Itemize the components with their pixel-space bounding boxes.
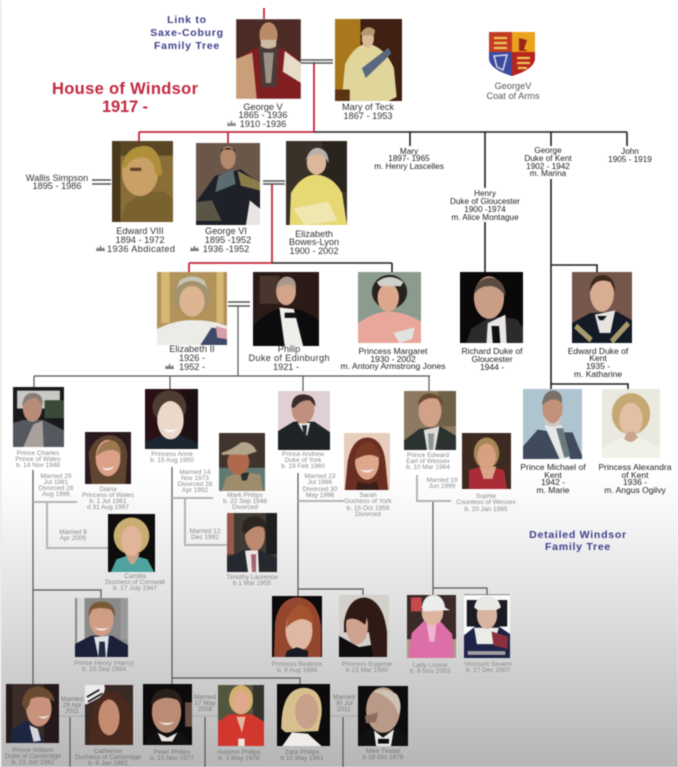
person: Elizabeth II: 1952 -	[179, 362, 205, 372]
marriage brackets	[33, 475, 451, 716]
person: Zara Philips: Zara Philips	[285, 749, 320, 756]
link: detailed Windsor family tree: Family Tree	[545, 541, 611, 553]
person: Princess Beatrice: b. 8 Aug 1988	[277, 667, 317, 674]
person: Princess Alexandra of Kent: Princess Alexandra	[598, 462, 672, 472]
person: Prince Edward	[404, 391, 456, 471]
link: detailed Windsor family tree: Detailed Windsor	[529, 529, 627, 541]
person: Catherine: Duchess of Cambridge	[75, 754, 141, 761]
person: Prince Andrew: Duke of York	[285, 457, 322, 464]
person: George V	[227, 19, 301, 129]
person: Peter Philips: b. 15 Nov 1977	[150, 755, 194, 762]
person: Mark Philips: b. 22 Sep 1948	[223, 498, 267, 505]
person: Princess Alexandra of Kent: m. Angus Ogilvy	[604, 485, 666, 495]
person: Wallis Simpson: Wallis Simpson	[26, 173, 88, 183]
person: Prince Michael of Kent: Kent	[544, 470, 562, 480]
person: Camilla: b. 17 July 1947	[113, 585, 157, 592]
person: John	[608, 147, 652, 164]
person: Elizabeth II: 1926 -	[179, 353, 205, 363]
person: Camilla: Duchess of Cornwall	[105, 579, 165, 586]
person: Princess Margaret: 1930 - 2002	[370, 354, 416, 364]
person: Mark Philips	[219, 433, 267, 511]
marriage note: Edward and Sophie	[426, 477, 458, 490]
person: Mark Philips: Mark Philips	[227, 492, 263, 499]
tree connectors: Elizabeth II descendants	[33, 306, 510, 684]
person: Sarah: Sarah	[359, 492, 377, 499]
person: Richard, Duke of Gloucester: Gloucester	[471, 354, 513, 364]
person: Sophie: Sophie	[476, 493, 496, 500]
marriage note: Peter and Autumn: 17 May	[194, 700, 216, 707]
person: George VI: 1895 -1952	[205, 235, 251, 245]
person: Philip	[248, 272, 330, 372]
person: Henry, Duke of Gloucester: Duke of Gloucester	[450, 197, 520, 206]
person: Edward, Duke of Kent: Edward Duke of	[568, 346, 629, 356]
person: Mike Tindall: Mike Tindall	[366, 748, 401, 755]
person: Edward VIII: 1936 Abdicated	[107, 244, 175, 254]
marriage note: Peter and Autumn	[194, 694, 216, 713]
marriage note: Edward and Sophie: Married 19	[426, 477, 458, 484]
marriage note: Andrew and Sarah: Married 23	[304, 473, 336, 480]
person: Henry, Duke of Gloucester: Henry	[474, 189, 497, 198]
person: Prince William: b. 21 Jun 1982	[11, 759, 55, 766]
person: Prince Edward: b. 10 Mar 1964	[406, 464, 450, 471]
person: Henry, Duke of Gloucester	[450, 189, 520, 222]
person: Sarah: b. 15 Oct 1959	[347, 505, 390, 512]
person: Edward VIII: 1894 - 1972	[115, 235, 165, 245]
person: Princess Eugenie: b 23 Mar 1990	[346, 667, 388, 674]
person: George VI: 1936 -1952	[203, 244, 249, 254]
person: Princess Margaret: Princess Margaret	[359, 346, 428, 356]
person: Richard, Duke of Gloucester: Richard Duke of	[462, 346, 523, 356]
person: Edward, Duke of Kent: m. Katharine	[574, 369, 622, 379]
marriage note: Zara and Mike: Married	[333, 694, 355, 701]
person: Prince Charles: Prince Charles	[17, 450, 60, 457]
marriage note: Andrew and Sarah	[303, 473, 338, 499]
person: Prince Edward: Earl of Wessex	[406, 458, 451, 465]
icon: George V coat of arms: GeorgeV	[495, 81, 532, 91]
link: Saxe-Coburg family tree: Link to	[167, 14, 207, 26]
marriage note: William and Catherine	[61, 696, 83, 715]
person: Sophie: Countess of Wessex	[456, 499, 516, 506]
marriage note: Charles and Camilla	[59, 529, 87, 542]
person: Mary of Teck: 1867 - 1953	[343, 111, 393, 121]
person: Prince Andrew	[278, 391, 330, 470]
person: Princess Eugenie: Princess Eugenie	[342, 661, 393, 668]
title	[52, 80, 199, 116]
link: detailed Windsor family tree	[529, 529, 627, 553]
person: Mary, Princess Royal: Mary	[400, 147, 419, 156]
person: Lady Louise: b. 8 Nov 2003	[410, 668, 451, 675]
person: Autumn Philips: b. 3 May 1978	[218, 755, 260, 762]
person: John: John	[621, 147, 639, 156]
person: George, Duke of Kent: m. Marina	[530, 169, 567, 178]
person: Sarah	[344, 433, 392, 518]
person: George VI: George VI	[205, 226, 247, 236]
marriage note: Peter and Autumn: Married	[194, 694, 216, 701]
person: Princess Beatrice: Princess Beatrice	[272, 661, 323, 668]
person: Princess Anne	[145, 389, 198, 464]
marriage note: Zara and Mike: 30 Jul	[335, 700, 353, 707]
person: John: 1905 - 1919	[608, 155, 652, 164]
person: Diana: d 31 Aug 1997	[87, 504, 129, 511]
marriage note: Andrew and Sarah: May 1996	[306, 492, 335, 499]
marriage note: Anne and Timothy: Married 12	[189, 528, 221, 535]
person: Prince Michael of Kent: m. Marie	[536, 485, 570, 495]
marriage note: William and Catherine: 29 Apr	[63, 702, 82, 709]
marriage note: Anne and Mark: Apr 1992	[182, 487, 209, 494]
person: Camilla: Camilla	[124, 573, 146, 580]
marriage double bars	[92, 60, 333, 306]
person: Sarah: Divorced	[355, 511, 381, 518]
person: Elizabeth Bowes-Lyon: Bowes-Lyon	[289, 237, 339, 247]
person: Mary of Teck: Mary of Teck	[342, 102, 394, 112]
person: Mary, Princess Royal: 1897- 1965	[388, 154, 430, 163]
person: Elizabeth II: Elizabeth II	[169, 344, 215, 354]
person: George V: George V	[243, 102, 284, 112]
person: Edward, Duke of Kent: 1935 -	[586, 361, 610, 371]
person: Sophie: b. 20 Jan 1965	[464, 506, 508, 513]
marriage note: Andrew and Sarah: Jul 1986	[308, 479, 333, 486]
person: Zara Philips: b 15 May 1981	[280, 755, 324, 762]
person: Lady Louise: Lady Louise	[412, 662, 448, 669]
marriage note: Anne and Timothy	[189, 528, 221, 541]
person: Prince Edward: Prince Edward	[407, 452, 450, 459]
marriage note: Andrew and Sarah: Divorced 30	[303, 486, 338, 493]
marriage note: Anne and Mark	[178, 469, 213, 494]
person: Princess Margaret	[340, 272, 446, 371]
marriage note: Charles and Diana: Aug 1996	[42, 491, 70, 498]
title: 1917 -	[102, 98, 148, 116]
link: Saxe-Coburg family tree: Saxe-Coburg	[150, 27, 224, 39]
person: Peter Philips: Peter Philips	[154, 749, 191, 756]
person: Elizabeth II	[157, 272, 227, 372]
person: Edward, Duke of Kent: Kent	[589, 353, 607, 363]
person: George V: 1865 - 1936	[238, 110, 288, 120]
person: Mary, Princess Royal	[374, 147, 444, 171]
marriage note: Anne and Mark: Married 14	[179, 469, 211, 476]
marriage note: William and Catherine: 2011	[65, 708, 79, 715]
person: Richard, Duke of Gloucester: 1944 -	[480, 362, 504, 372]
person: George, Duke of Kent: 1902 - 1942	[526, 162, 570, 171]
person: Princess Alexandra of Kent	[598, 389, 672, 495]
marriage note: Charles and Diana: Married 29	[40, 473, 72, 480]
person: Viscount Severn	[464, 595, 512, 674]
person: Zara Philips	[277, 684, 330, 762]
person: Autumn Philips: Autumn Philips	[217, 749, 261, 756]
person: Edward VIII	[96, 141, 175, 254]
person: Autumn Philips	[217, 685, 264, 762]
person: Mike Tindall	[358, 686, 408, 761]
person: Diana: b. 1 Jul 1961	[89, 498, 127, 505]
person: George, Duke of Kent: Duke of Kent	[524, 154, 572, 163]
person: Peter Philips	[143, 684, 194, 762]
marriage note: Peter and Autumn: 2008	[198, 706, 213, 713]
person: Philip: Philip	[278, 344, 300, 354]
person: Prince Charles	[13, 387, 64, 469]
person: Lady Louise	[407, 595, 456, 675]
marriage note: Anne and Mark: Divorced 28	[178, 481, 213, 488]
person: Princess Anne: b. 15 Aug 1950	[150, 457, 194, 464]
person: Catherine: Catherine	[94, 748, 122, 755]
person: Wallis Simpson: 1895 - 1986	[32, 181, 82, 191]
person: Prince Andrew: Prince Andrew	[282, 451, 324, 458]
person: Diana: Princess of Wales	[82, 492, 135, 499]
person: Mark Philips: Divorced	[232, 504, 258, 511]
marriage note: William and Catherine: Married	[61, 696, 83, 703]
person: Prince Michael of Kent	[520, 389, 586, 495]
person: Sarah: Duchess of York	[345, 498, 392, 505]
person: Prince Henry	[74, 598, 134, 673]
person: Elizabeth Bowes-Lyon: Elizabeth	[295, 229, 333, 239]
person: Prince Andrew: b. 19 Feb 1960	[281, 463, 325, 470]
person: George V: 1910 -1936	[240, 119, 286, 129]
tree connectors: royal line in red	[139, 8, 314, 272]
person: Sophie	[456, 433, 516, 513]
person: Richard, Duke of Gloucester	[460, 272, 523, 372]
marriage note: Anne and Mark: Nov 1973	[181, 475, 209, 482]
marriage note: Zara and Mike	[333, 694, 355, 713]
person: Wallis Simpson	[26, 173, 88, 191]
person: Princess Beatrice	[272, 596, 323, 674]
person: Catherine	[75, 685, 141, 767]
link: Saxe-Coburg family tree	[150, 14, 224, 52]
person: Princess Alexandra of Kent: 1936 -	[623, 477, 647, 487]
person: Mary of Teck	[335, 19, 402, 121]
person: Edward, Duke of Kent	[568, 272, 632, 379]
person: Princess Anne: Princess Anne	[151, 451, 193, 458]
marriage note: Charles and Camilla: Married 9	[59, 529, 87, 536]
marriage note: Anne and Timothy: Dec 1992	[191, 534, 219, 541]
person: George VI	[190, 143, 260, 254]
tree connectors: George V children and grandchildren in black	[272, 132, 628, 389]
person: Elizabeth Bowes-Lyon: 1900 - 2002	[289, 246, 339, 256]
person: Prince Michael of Kent: 1942 -	[541, 477, 565, 487]
person: Camilla	[105, 514, 165, 592]
person: Prince Henry: Prince Henry (Harry)	[74, 660, 134, 667]
icon: George V coat of arms	[486, 32, 540, 101]
person: Timothy Laurence	[226, 513, 278, 587]
person: Princess Eugenie	[339, 595, 393, 674]
marriage note: Edward and Sophie: Jun 1999	[429, 483, 456, 490]
person: Edward VIII: Edward VIII	[116, 226, 164, 236]
person: Henry, Duke of Gloucester: 1900 -1974	[464, 205, 506, 214]
person: Elizabeth Bowes-Lyon	[286, 141, 347, 256]
person: Diana	[82, 432, 135, 511]
person: Prince William	[5, 684, 61, 766]
marriage note: Charles and Diana: Jul 1981	[44, 479, 69, 486]
title: House of Windsor	[52, 80, 199, 98]
link: Saxe-Coburg family tree: Family Tree	[154, 40, 220, 52]
person: Princess Alexandra of Kent: of Kent	[622, 470, 649, 480]
person: Timothy Laurence: Timothy Laurence	[226, 574, 278, 581]
person: Prince Henry: b. 15 Sep 1984	[82, 666, 126, 673]
person: Philip: 1921 -	[273, 362, 299, 372]
person: Prince Michael of Kent: Prince Michael of	[520, 462, 586, 472]
person: George, Duke of Kent	[524, 146, 572, 178]
grandchildren marriage drop lines	[70, 717, 343, 767]
person: Catherine: b. 9 Jan 1982	[88, 760, 128, 767]
person: Prince William: Prince William	[12, 747, 54, 754]
person: Princess Margaret: m. Antony Armstrong Jones	[340, 361, 446, 371]
person: Diana: Diana	[100, 486, 117, 493]
person: Philip: Duke of Edinburgh	[248, 353, 330, 363]
person: Viscount Severn: Viscount Severn	[464, 661, 512, 668]
marriage note: Charles and Diana: Divorced 28	[39, 485, 74, 492]
person: Mike Tindall: b 18 Oct 1978	[363, 754, 404, 761]
marriage note: Zara and Mike: 2011	[337, 706, 351, 713]
icon: George V coat of arms: Coat of Arms	[486, 91, 540, 101]
marriage note: Charles and Camilla: Apr 2005	[60, 535, 87, 542]
person: Prince Charles: b. 14 Nov 1948	[16, 462, 60, 469]
person: Viscount Severn: b. 17 Dec 2007	[466, 667, 510, 674]
person: Prince Charles: Prince of Wales	[15, 456, 61, 463]
person: Mary, Princess Royal: m. Henry Lascelles	[374, 162, 444, 171]
person: Timothy Laurence: b 1 Mar 1955	[233, 580, 272, 587]
person: George, Duke of Kent: George	[534, 146, 562, 155]
person: Prince William: Duke of Cambridge	[5, 753, 61, 760]
person: Henry, Duke of Gloucester: m. Alice Montague	[451, 213, 519, 222]
marriage note: Charles and Diana	[39, 473, 74, 498]
